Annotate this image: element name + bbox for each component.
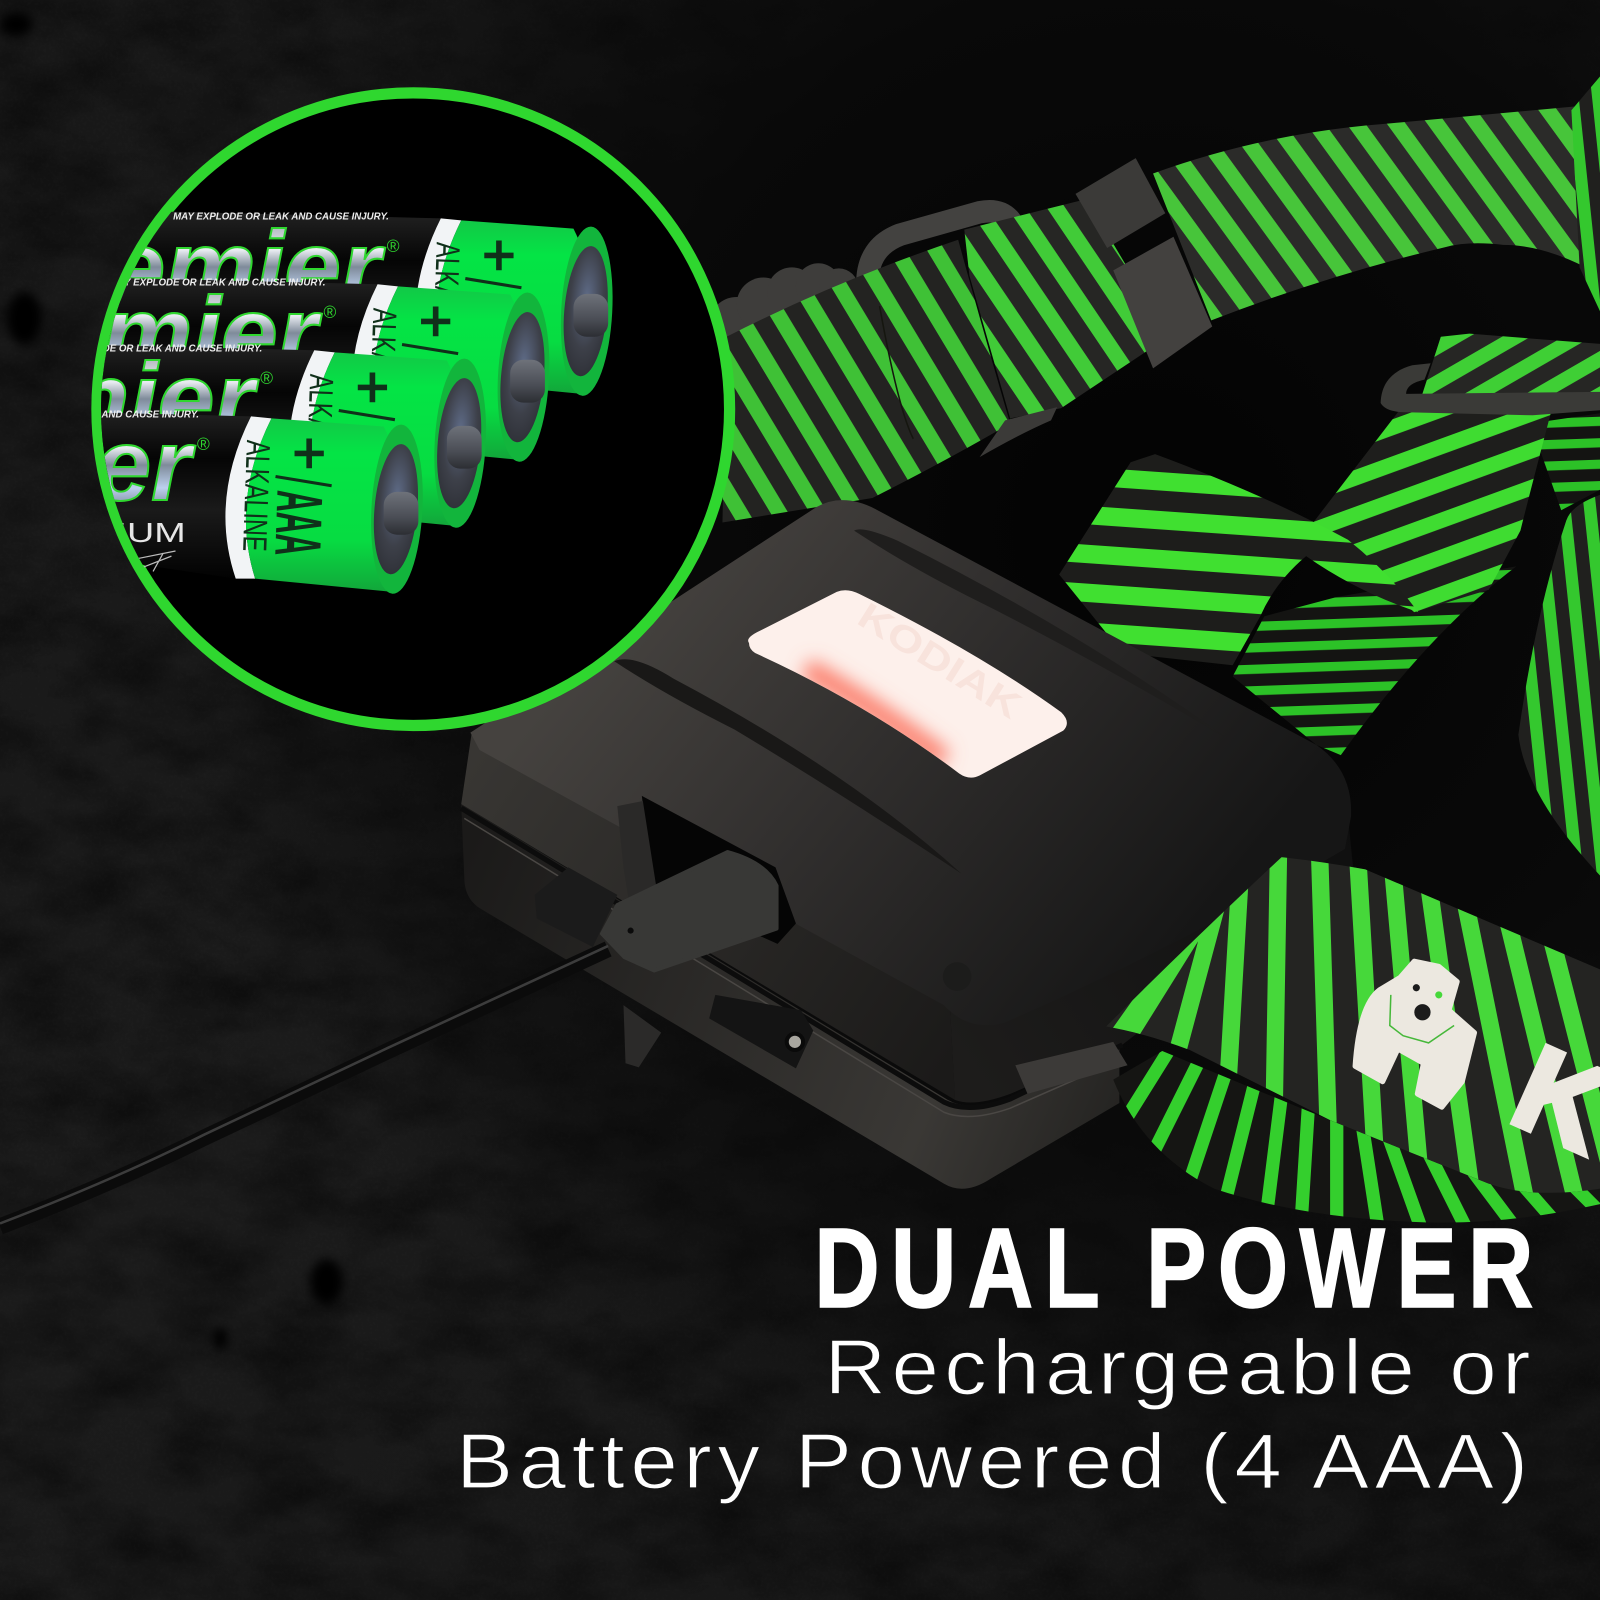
strap upper right: [1420, 334, 1600, 400]
right face: [949, 806, 1353, 1102]
battery 3: ®: [260, 368, 273, 388]
groove upper: [854, 529, 1224, 737]
strap top right: [1153, 106, 1584, 320]
loop tab from housing to strap: [1015, 1042, 1128, 1094]
front band with logo: [1106, 857, 1600, 1193]
strap lower thin stripes: [1233, 566, 1516, 755]
lid corner bump: [943, 962, 971, 991]
lower band under fold: [1114, 1051, 1600, 1222]
battery 2: AAA: [388, 357, 463, 425]
battery 1 (back): Premier: [1, 210, 386, 324]
battery inset circle: [91, 87, 736, 732]
latch: [709, 995, 813, 1068]
strap small twist right: [1531, 413, 1600, 510]
front band stripes: [1106, 857, 1600, 1193]
housing: battery box: [0, 500, 1353, 1227]
battery 2: +: [419, 289, 452, 353]
switch glow: [806, 668, 944, 760]
lower buckle edge: [980, 407, 1057, 457]
heading: DUAL POWER: [814, 1204, 1533, 1331]
circle fill and ring: [97, 93, 730, 726]
battery 2: ®: [323, 302, 336, 322]
battery 1 (back): ®: [387, 236, 400, 256]
slider clip upper: [1076, 158, 1165, 248]
strap right wedge: [1518, 495, 1600, 876]
strap fold seam: [880, 306, 913, 439]
battery 2: [101, 278, 550, 462]
charging port cavity: [642, 796, 796, 944]
battery 3: AAA: [325, 423, 400, 491]
battery 1 (back): ALKALINE: [425, 242, 466, 354]
lower case: [461, 804, 1119, 1189]
lower seam highlight: [464, 818, 1117, 1116]
groove lower: [614, 659, 961, 873]
seam line: [461, 808, 1122, 1107]
batteries: [101, 212, 613, 594]
rear buckle: [867, 211, 1010, 284]
battery 2: MAY EXPLODE OR LEAK AND CAUSE INJURY.: [110, 277, 326, 288]
slider clip lower: [1113, 237, 1212, 368]
battery 4 (front): +: [292, 421, 326, 485]
subheading line 2: Battery Powered (4 AAA): [456, 1418, 1528, 1505]
rubber flap: [617, 801, 656, 923]
battery 1 (back): +: [482, 223, 516, 287]
headlamp strap assembly behind housing: [709, 77, 1600, 876]
battery 4 (front): [101, 410, 423, 594]
strap diagonal centre: [1313, 408, 1551, 612]
bear logo: [1355, 961, 1474, 1107]
embossed brand on pad: KODIAK: [851, 594, 1029, 727]
screw: [785, 1032, 805, 1052]
lid top: [470, 500, 1351, 1025]
battery 4 (front): PREMIUM: [8, 518, 186, 549]
battery 3: [101, 344, 486, 528]
battery 4 (front): AAA: [261, 489, 337, 557]
right buckle: [1381, 363, 1600, 415]
battery 1 (back): AAA: [451, 291, 526, 359]
subheading line 1: Rechargeable or: [824, 1324, 1531, 1411]
strap middle segment: [964, 199, 1168, 418]
battery 3: +: [356, 355, 389, 419]
charging cable: [0, 946, 608, 1227]
usb plug: [602, 852, 777, 970]
side face: [461, 735, 955, 1100]
rubber plug left: [535, 867, 617, 947]
battery 4 (front): ®: [197, 434, 210, 454]
battery 4 (front): ALKALINE: [235, 440, 276, 552]
battery 1 (back): [110, 212, 613, 396]
battery 3: ALKALINE: [298, 373, 339, 486]
strap far right top corner: [1571, 77, 1600, 311]
flap lower: [623, 1005, 661, 1067]
strap left segment: [722, 240, 1010, 522]
battery 1 (back): MAY EXPLODE OR LEAK AND CAUSE INJURY.: [173, 211, 389, 222]
strap twist: [1059, 454, 1418, 665]
switch pad: [748, 590, 1067, 778]
rubber coil: [709, 263, 858, 352]
battery 2: ALKALINE: [362, 307, 402, 420]
battery 3: MAY EXPLODE OR LEAK AND CAUSE INJURY.: [47, 343, 262, 354]
